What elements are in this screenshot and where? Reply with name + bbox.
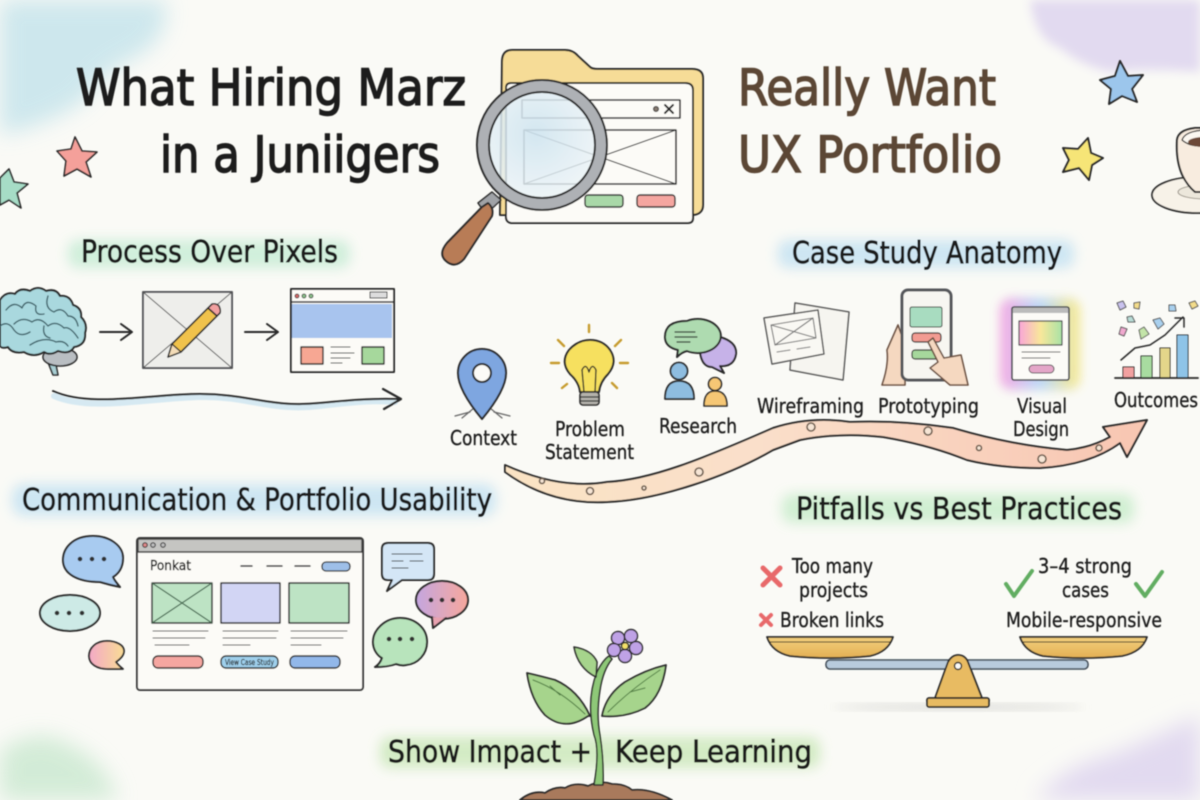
- heading: keep learning: Keep Learning: [615, 735, 812, 770]
- label: context: Context: [450, 426, 517, 450]
- arrow: [100, 324, 132, 340]
- timeline ribbon arrow: [505, 420, 1147, 502]
- icon: finished browser mockup: [291, 289, 394, 372]
- watercolor blob: bottom right: [1035, 715, 1200, 800]
- icon: soil mound: [520, 782, 672, 800]
- logo text: Ponkat: [150, 559, 191, 574]
- icon: wireframe sheets: [764, 303, 849, 380]
- icon: large cross: [763, 568, 780, 585]
- best practice text: 3–4 strong: [1038, 554, 1132, 578]
- step: wireframing: [757, 303, 864, 418]
- section: process over pixels: [0, 235, 401, 409]
- pitfall text: Broken links: [780, 608, 884, 632]
- pitfalls list: [761, 554, 884, 632]
- icon: check: [1006, 571, 1032, 596]
- step: context: [450, 349, 517, 450]
- button label: View Case Study: [225, 658, 274, 667]
- icon: sprout with flower: [527, 630, 666, 785]
- star: yellow: [1063, 138, 1103, 180]
- icon: map pin: [455, 349, 510, 419]
- step: problem statement: Statement: [545, 440, 634, 464]
- arrow: [245, 324, 278, 340]
- watercolor blob: top left: [0, 0, 166, 135]
- heading highlight band: [12, 484, 496, 516]
- star: mint: [0, 169, 28, 208]
- title: right part: [738, 59, 1002, 184]
- heading: show impact: Show Impact +: [388, 735, 592, 770]
- step: problem statement: [545, 325, 634, 464]
- step: visual design: Design: [1013, 417, 1069, 441]
- pitfall text: Too many: [791, 554, 873, 578]
- speech bubbles: right: [373, 543, 468, 667]
- icon: growth bar chart with confetti: [1115, 301, 1198, 378]
- heading: case study anatomy: Case Study Anatomy: [792, 236, 1062, 271]
- label: research: Research: [659, 414, 737, 438]
- speech bubbles: left: [40, 536, 124, 669]
- pitfalls list: projects: [799, 578, 868, 602]
- label: wireframing: Wireframing: [757, 394, 864, 418]
- title: left part: in a Juniigers: [160, 126, 440, 184]
- heading: communication and portfolio usability: Communication & Portfolio Usability: [22, 483, 492, 518]
- icon: wireframe with pencil: [143, 292, 232, 368]
- best practices list: [1006, 554, 1162, 632]
- section: case study anatomy: [450, 236, 1198, 502]
- icon: phone in hand: [882, 290, 968, 385]
- star: coral: [57, 137, 97, 177]
- step: visual design: [1000, 298, 1080, 441]
- step: prototyping: [878, 290, 979, 418]
- label: visual design: Visual: [1017, 394, 1067, 418]
- step: research: [659, 319, 737, 438]
- section: communication and portfolio usability: [12, 483, 496, 690]
- title: right part: UX Portfolio: [738, 126, 1002, 184]
- heading highlight band: [380, 737, 820, 768]
- portfolio browser mockup: [137, 538, 363, 690]
- title: left part: What Hiring Marz: [76, 59, 466, 117]
- heading highlight band: [782, 494, 1134, 523]
- icon: coffee cup: [1152, 128, 1200, 213]
- arrow: process swoosh: [53, 389, 401, 409]
- best practices list: cases: [1062, 578, 1109, 602]
- section: show impact and keep learning: [380, 630, 820, 800]
- heading highlight band: [778, 240, 1074, 268]
- heading: process over pixels: Process Over Pixels: [81, 235, 338, 270]
- title: left part: [76, 59, 466, 184]
- star: blue: [1100, 61, 1143, 104]
- label: problem statement: Problem: [555, 417, 625, 441]
- step: outcomes: [1114, 301, 1198, 412]
- icon: rainbow mockup: [1000, 298, 1080, 390]
- icon: folder with magnifying glass: [442, 50, 703, 265]
- heading highlight band: [68, 240, 350, 268]
- watercolor blob: bottom left: [0, 736, 118, 800]
- label: prototyping: Prototyping: [878, 394, 979, 418]
- flower: [608, 630, 642, 662]
- icon: balance scale: [767, 637, 1147, 710]
- icon: brain: [0, 288, 86, 375]
- icon: check: [1136, 572, 1162, 596]
- icon: people with speech bubbles: [665, 319, 736, 406]
- best practice text: Mobile-responsive: [1006, 608, 1162, 632]
- heading: pitfalls vs best practices: Pitfalls vs Best Practices: [796, 492, 1122, 527]
- icon: lightbulb: [551, 325, 628, 405]
- section: pitfalls vs best practices: [761, 492, 1162, 710]
- watercolor blob: top right: [1030, 0, 1200, 72]
- icon: small cross: [761, 615, 771, 625]
- title: right part: Really Want: [738, 59, 996, 117]
